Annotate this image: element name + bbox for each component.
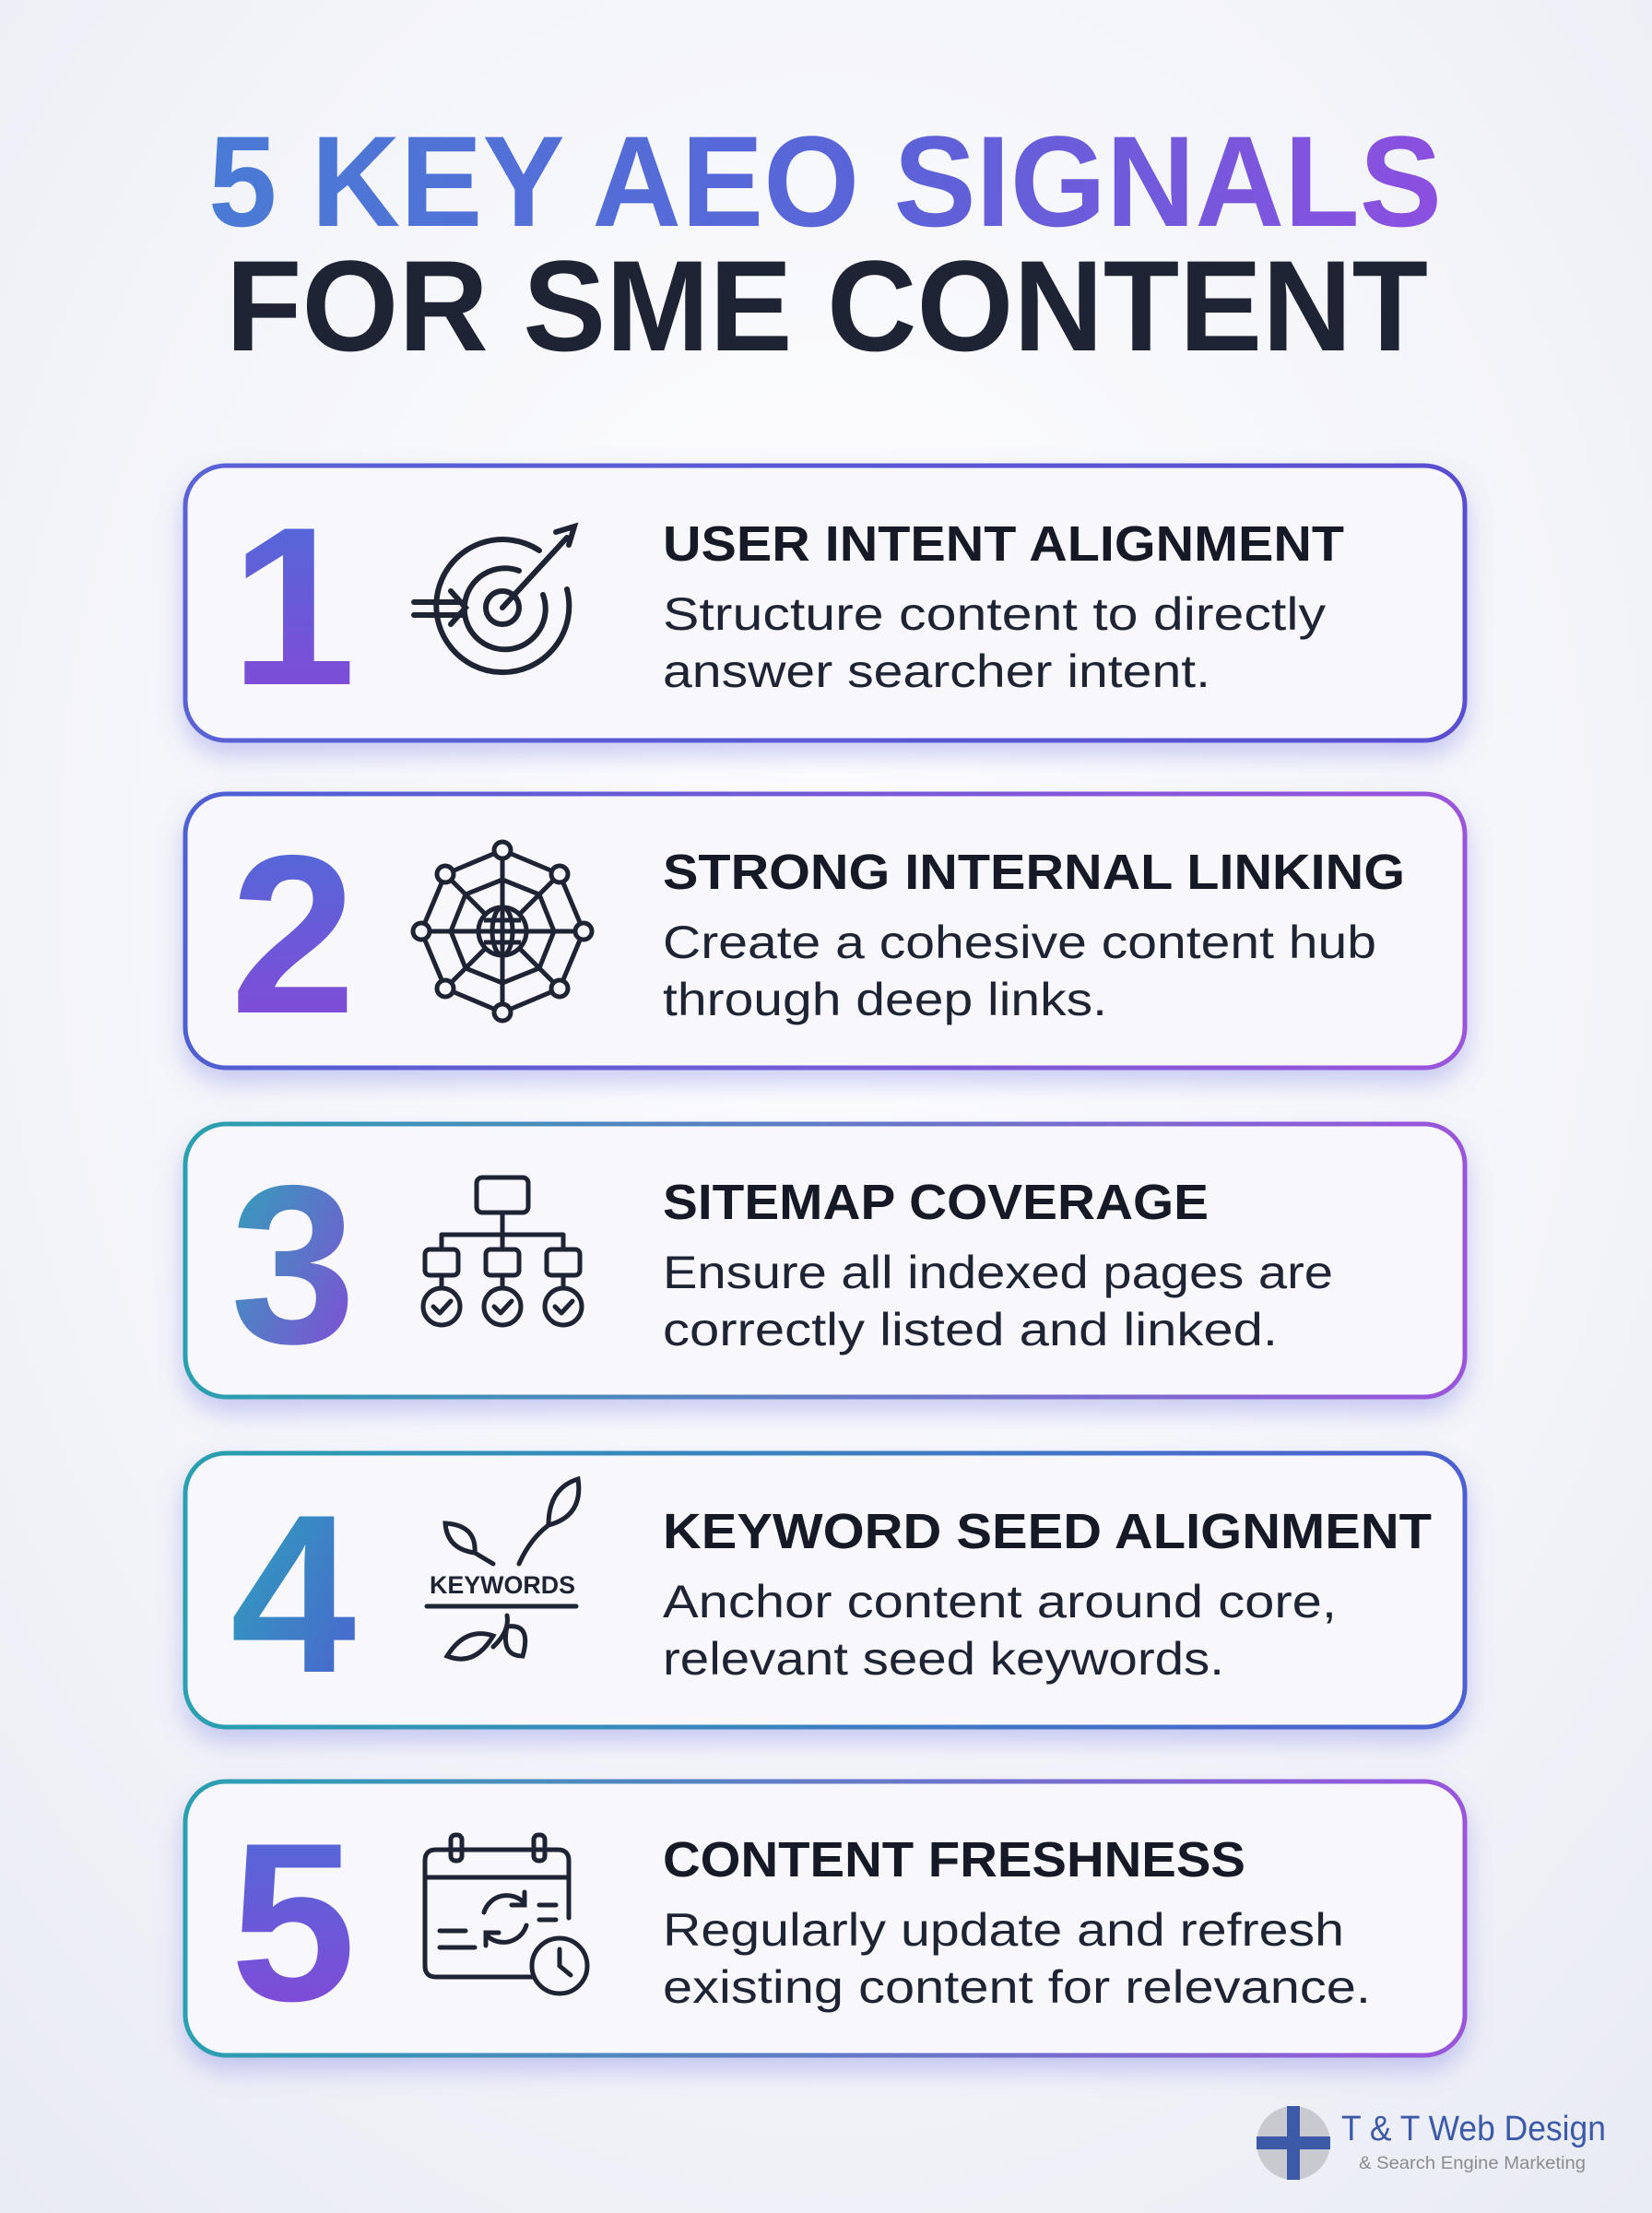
heading and text: Ensure all indexed pages are <box>663 1247 1333 1298</box>
heading and text: STRONG INTERNAL LINKING <box>663 845 1405 900</box>
heading and text: answer searcher intent. <box>663 645 1210 697</box>
heading and text: CONTENT FRESHNESS <box>663 1832 1245 1888</box>
panel: card 3 <box>185 1124 1465 1397</box>
heading and text <box>663 1175 1333 1355</box>
number 5: 5 <box>230 1795 356 2048</box>
number 4: 4 <box>230 1467 356 1720</box>
number 2: 2 <box>230 808 356 1060</box>
icon: keywords sprout: KEYWORDS <box>430 1571 575 1599</box>
heading and text: through deep links. <box>663 974 1107 1025</box>
heading and text: correctly listed and linked. <box>663 1304 1278 1355</box>
panel: card 5 <box>185 1781 1465 2055</box>
title <box>208 109 1442 378</box>
number 1: 1 <box>230 479 356 732</box>
logo: T & T Web Design <box>1341 2110 1606 2148</box>
title: 5 KEY AEO SIGNALS <box>208 109 1442 254</box>
panel: card 4 <box>185 1453 1465 1727</box>
heading and text: SITEMAP COVERAGE <box>663 1175 1209 1230</box>
heading and text <box>663 516 1344 697</box>
logo: & Search Engine Marketing <box>1359 2154 1586 2173</box>
heading and text: Create a cohesive content hub <box>663 917 1376 968</box>
heading and text: USER INTENT ALIGNMENT <box>663 516 1344 572</box>
heading and text: Structure content to directly <box>663 588 1326 640</box>
heading and text <box>663 1504 1432 1685</box>
logo <box>1257 2106 1606 2180</box>
title: FOR SME CONTENT <box>226 233 1428 378</box>
heading and text: Anchor content around core, <box>663 1576 1337 1627</box>
heading and text: existing content for relevance. <box>663 1961 1371 2013</box>
heading and text: relevant seed keywords. <box>663 1633 1224 1685</box>
panel: card 1 <box>185 466 1465 740</box>
icon: keywords sprout <box>427 1479 579 1659</box>
heading and text: KEYWORD SEED ALIGNMENT <box>663 1504 1432 1559</box>
heading and text <box>663 1832 1371 2013</box>
number 3: 3 <box>230 1138 356 1391</box>
heading and text <box>663 845 1405 1025</box>
icon: calendar refresh clock <box>425 1835 587 1994</box>
icon: sitemap <box>423 1178 582 1325</box>
heading and text: Regularly update and refresh <box>663 1904 1344 1956</box>
icon: target <box>414 527 574 672</box>
panel: card 2 <box>185 794 1465 1068</box>
icon: web network <box>413 842 592 1021</box>
